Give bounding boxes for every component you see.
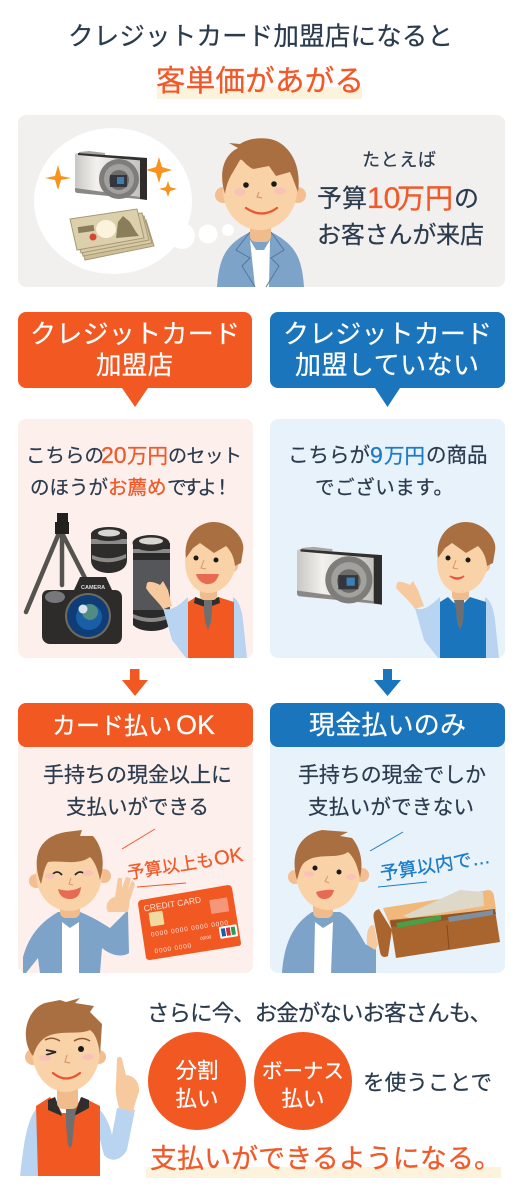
- icon: credit card: CREDIT CARD: [143, 895, 202, 913]
- panel: non-merchant offer: [270, 419, 505, 658]
- text: only cash line 2: 支払いができない: [308, 796, 474, 819]
- highlight: headline underline: [157, 87, 362, 99]
- text: offer line 1: 万円: [384, 445, 425, 468]
- heading: not a credit card merchant: 加盟していない: [295, 350, 479, 380]
- thought bubble: [34, 128, 234, 274]
- person: happy customer OK sign: [23, 830, 135, 973]
- heading: card payment OK: [18, 703, 253, 747]
- text: offer line 1: 9: [370, 442, 383, 468]
- text: over budget OK: [126, 844, 245, 884]
- icon: tripod: [26, 513, 85, 612]
- heading: cash only: [270, 703, 505, 747]
- icon: sparkles: [45, 157, 177, 197]
- heading: card payment OK: カード払い: [52, 713, 172, 740]
- text: over budget OK: 予算以上も: [126, 850, 215, 883]
- text: by using: を使うことで: [363, 1071, 492, 1095]
- text: offer line 1: [288, 442, 488, 468]
- icon: credit card: 00/00: [200, 934, 212, 941]
- person: winking clerk pointing: [20, 998, 139, 1176]
- person: blue vest clerk: [396, 522, 499, 658]
- badge: bonus payment: 払い: [281, 1087, 325, 1111]
- headline: 客単価があがる: [156, 65, 364, 98]
- text: speech line 1: こちらの: [26, 445, 104, 467]
- heading: cash only: 現金払いのみ: [309, 710, 466, 740]
- text: for example: たとえば: [362, 150, 436, 170]
- badge: bonus payment: [254, 1032, 352, 1130]
- text: budget 100,000 yen: 予算: [317, 185, 367, 213]
- icon: credit card: 0000 0000 0000 0000: [150, 920, 229, 939]
- text: speech line 1: [26, 442, 242, 468]
- icon: DSLR camera: [42, 577, 122, 644]
- panel: cash only: [270, 703, 505, 973]
- person: orange vest clerk: [146, 522, 247, 658]
- person: customer with wallet: [282, 830, 378, 973]
- badge: installment payment: 分割: [175, 1059, 219, 1083]
- text: over budget OK: OK: [213, 844, 245, 870]
- text: speech line 2: ですよ！: [167, 477, 232, 499]
- text: budget 100,000 yen: [317, 182, 479, 215]
- icon: brown wallet with banknotes: [374, 890, 500, 958]
- text: speech line 1: のセット: [168, 446, 242, 467]
- text: only cash line 1: 手持ちの現金でしか: [298, 764, 486, 787]
- title: クレジットカード加盟店になると: [68, 23, 453, 51]
- title: [68, 23, 453, 99]
- text: speech line 2: のほうが: [30, 477, 108, 499]
- text: speech line 1: 20: [101, 442, 127, 468]
- heading: credit card merchant: [18, 312, 252, 407]
- text: budget 100,000 yen: 万円: [397, 183, 453, 214]
- icon: telephoto lens: [132, 535, 170, 631]
- icon: stack of banknotes: [70, 209, 154, 260]
- accent lines: [370, 832, 427, 887]
- text: budget 100,000 yen: 10: [367, 182, 400, 215]
- badge: bonus payment: ボーナス: [262, 1060, 344, 1083]
- badge: installment payment: 払い: [175, 1087, 219, 1111]
- text: budget 100,000 yen: の: [454, 185, 479, 213]
- badge: installment payment: [148, 1032, 246, 1130]
- icon: credit card: 0000 0000: [154, 943, 192, 955]
- panel: card payment OK: [18, 703, 253, 973]
- icon: digital camera: [297, 547, 382, 605]
- highlight: conclusion underline: [146, 1167, 501, 1178]
- accent lines: [122, 829, 186, 887]
- icon: credit card: [138, 885, 241, 960]
- text: customer arrives: お客さんが来店: [317, 222, 484, 249]
- text: speech line 2: [30, 477, 232, 499]
- text: speech line 2: お薦め: [108, 477, 167, 499]
- text: offer line 1: の商品: [426, 444, 488, 467]
- panel: merchant recommends: [18, 419, 253, 658]
- arrow: orange down: [122, 669, 148, 696]
- heading: credit card merchant: クレジットカード: [30, 319, 240, 349]
- text: conclusion: 支払いができるようになる。: [150, 1144, 501, 1174]
- text: offer line 2: でございます。: [315, 476, 453, 499]
- text: can pay line 2: 支払いができる: [66, 796, 209, 819]
- icon: DSLR camera: CAMERA: [81, 585, 105, 591]
- icon: small lens: [91, 527, 127, 573]
- heading: credit card merchant: 加盟店: [96, 352, 173, 380]
- arrow: blue down: [374, 669, 401, 696]
- text: speech line 1: 万円: [127, 445, 168, 468]
- heading: not a credit card merchant: クレジットカード: [283, 319, 492, 349]
- text: customers without money too: さらに今、お金がないお客さんも、: [147, 1001, 492, 1026]
- text: offer line 1: こちらが: [288, 444, 370, 467]
- heading: not a credit card merchant: [270, 312, 505, 407]
- text: can pay beyond cash: 手持ちの現金以上に: [43, 764, 232, 787]
- person: customer thinking: [215, 138, 306, 287]
- text: within budget: 予算以内で…: [379, 846, 491, 884]
- icon: digital camera: [75, 151, 147, 200]
- panel: customer with budget: [18, 115, 505, 287]
- heading: card payment OK: OK: [176, 710, 215, 740]
